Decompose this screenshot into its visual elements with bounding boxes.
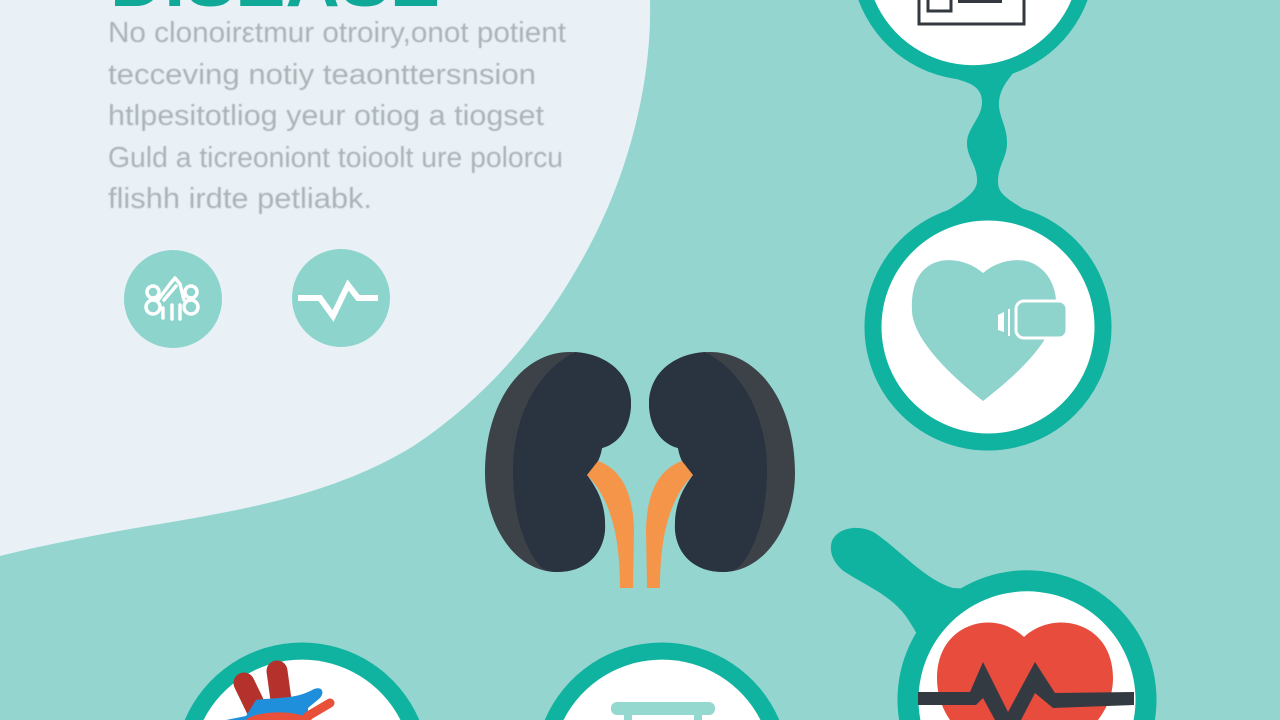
right ureter (646, 461, 693, 588)
left ureter (587, 461, 634, 588)
circle: heart with battery (873, 212, 1103, 442)
icon: battery (998, 301, 1067, 338)
icon: anatomical heart (226, 671, 330, 720)
circle: table (545, 642, 779, 720)
icon: document (919, 0, 1024, 24)
icon: table (611, 702, 715, 720)
circle: anatomical heart (185, 642, 419, 720)
icon: red heart (937, 622, 1113, 720)
icon: ECG line (918, 662, 1134, 720)
text block: description: No clonoirεtmur otroiry,onot potient (108, 17, 566, 49)
text block: description: htlpesitotliog yeur otiog a tiogset (108, 100, 544, 132)
panel: intro blob (0, 0, 650, 556)
text block: description: tecceving notiy teaonttersnsion (108, 59, 536, 91)
circle: document icon (858, 0, 1088, 80)
right kidney (649, 352, 795, 572)
connected circles: top and middle (858, 0, 1103, 442)
kidneys (485, 352, 795, 588)
text block: description (108, 17, 566, 215)
icon: pale heart (912, 260, 1056, 401)
magnifier handle (831, 528, 990, 650)
left kidney (485, 352, 631, 572)
magnifier lens (898, 570, 1156, 720)
text block: description: flishh irdte petliabk. (108, 183, 372, 215)
connector neck (945, 62, 1028, 212)
text block: description: Guld a ticreoniont toioolt ure polorcu (108, 142, 563, 174)
icon: pulse badge (292, 249, 390, 347)
magnifier with heart (831, 528, 1156, 720)
icon: scribbled chart badge (124, 250, 222, 348)
